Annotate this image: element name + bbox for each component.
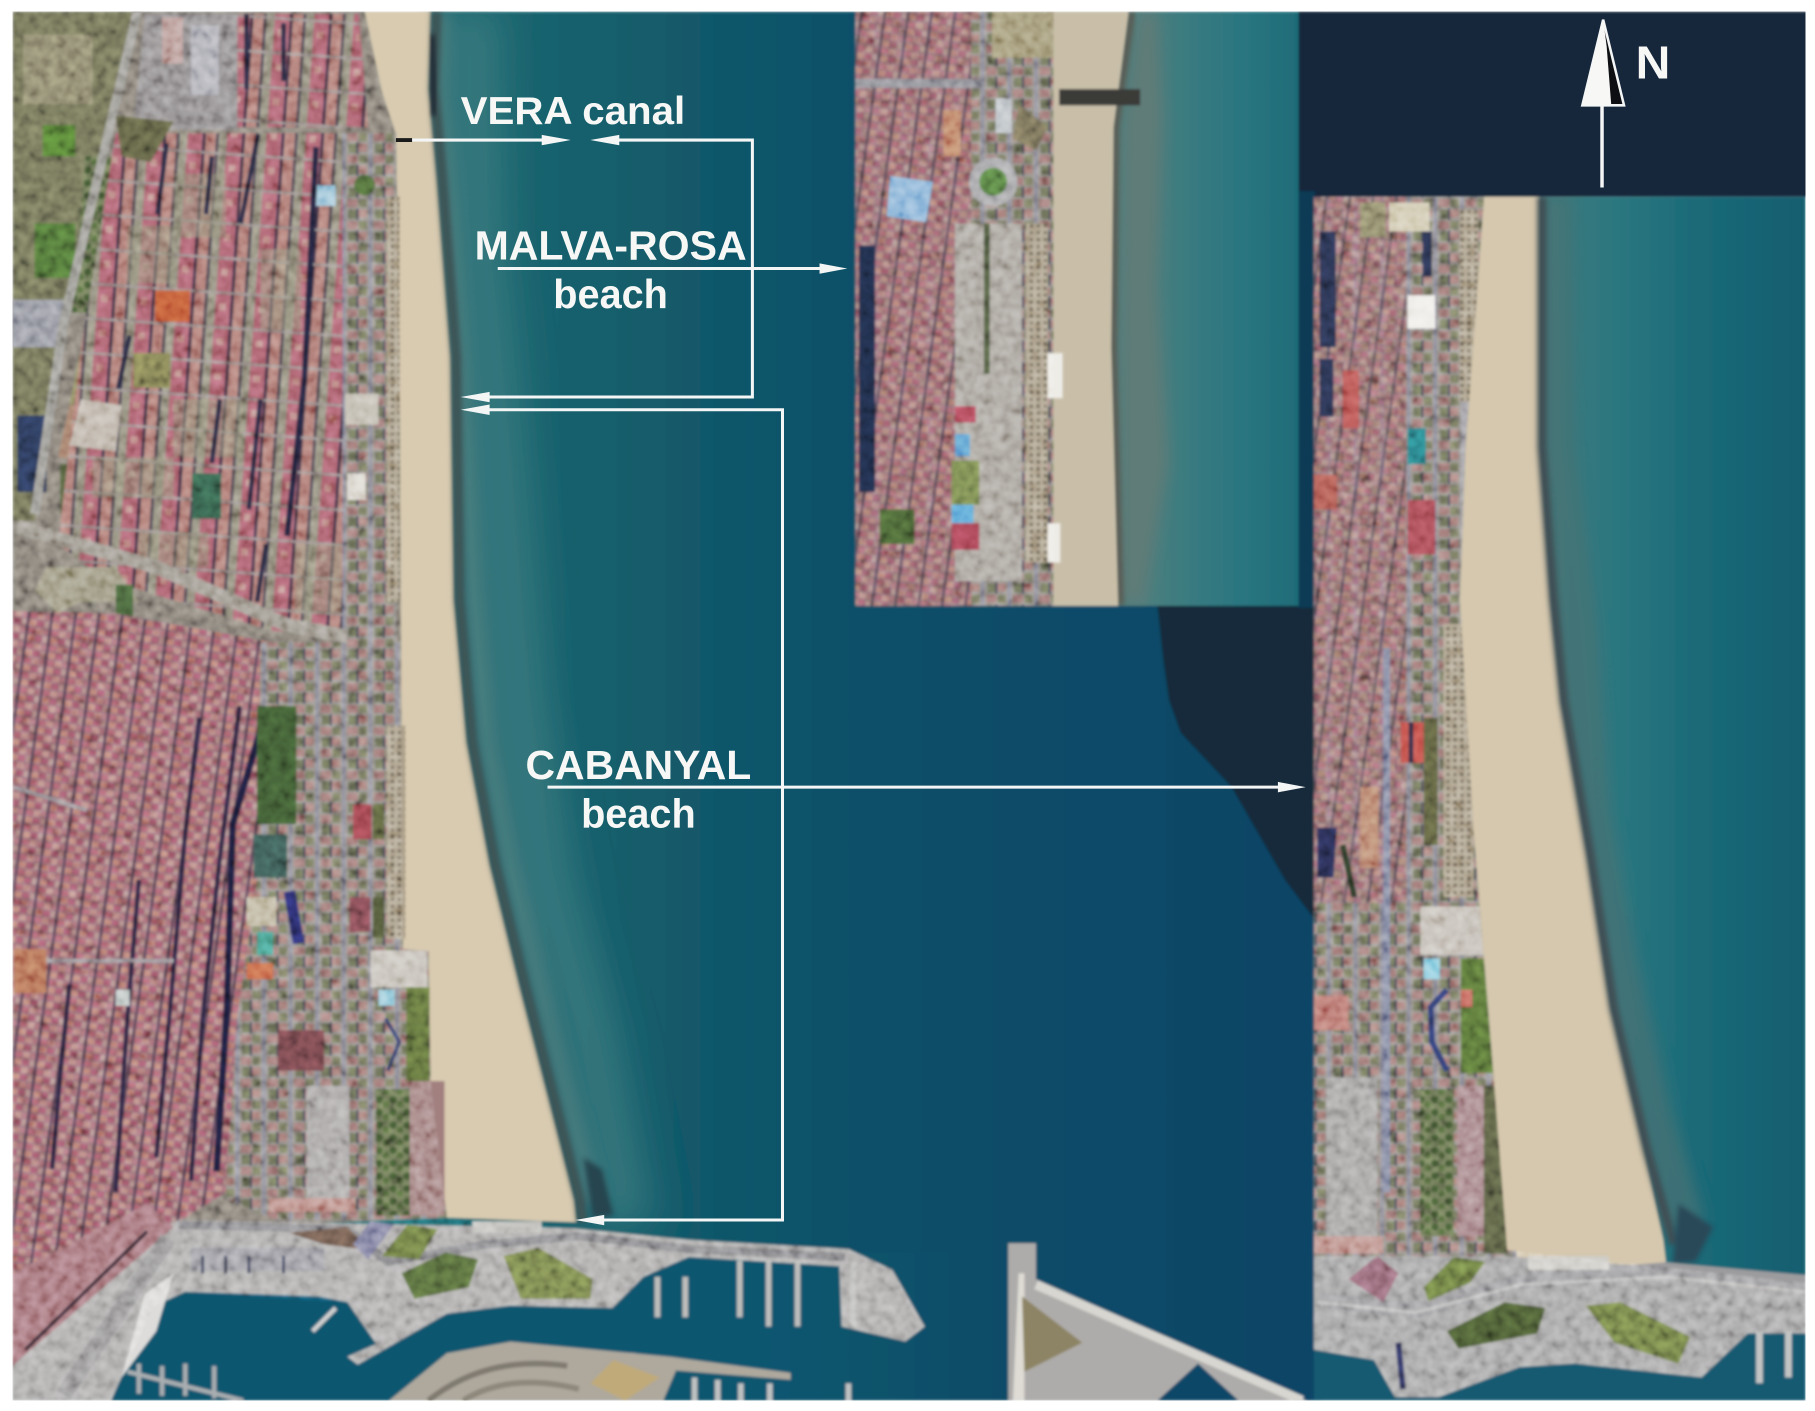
grain over inset land (1314, 197, 1806, 1401)
label: Cabanyal: CABANYAL (526, 742, 751, 788)
arrow: Malva-Rosa beach to inset (498, 263, 847, 274)
inset port (1314, 1256, 1806, 1397)
harbour island (389, 1342, 791, 1401)
arrow: Cabanyal beach to inset (548, 782, 1306, 792)
grain over main land (13, 12, 939, 1401)
eastern mixed blocks (226, 642, 447, 1221)
main road (35, 9, 138, 514)
marina piers (657, 1261, 853, 1327)
panel: beach sand (365, 12, 613, 1222)
farmland (12, 12, 137, 521)
label: Malva-Rosa beach: beach (553, 271, 668, 317)
label: north: N (1636, 37, 1670, 89)
arrow: Vera canal to Malva-Rosa limits (461, 135, 752, 402)
inset: southern beach photo (1314, 197, 1806, 1401)
dark no-data patch (1158, 605, 1320, 926)
diagonal avenue (17, 527, 347, 637)
panel: port and marina (13, 1204, 1307, 1401)
coastal strip (343, 133, 396, 642)
inset land blocks (1314, 197, 1516, 1354)
icon: north arrow (1582, 20, 1624, 188)
arrow: Cabanyal limits bracket (461, 405, 782, 1225)
label: Vera canal: VERA canal (461, 89, 685, 133)
dense southern grid (12, 610, 268, 1274)
inset: northern beach photo (855, 12, 1300, 607)
panel: main sea area (13, 12, 1321, 1401)
label: Malva-Rosa: MALVA-ROSA (475, 222, 747, 268)
promenade and docks (13, 1220, 925, 1401)
grain over north inset land (855, 12, 1053, 605)
label: Cabanyal beach: beach (581, 791, 696, 837)
mixed plots across northern town (93, 174, 341, 613)
arrow: Vera canal outfall (396, 135, 571, 145)
dark corner behind north arrow (1299, 12, 1808, 197)
northern town blocks (59, 132, 344, 632)
breakwater (1008, 1243, 1307, 1401)
panel: city blocks (12, 9, 447, 1377)
